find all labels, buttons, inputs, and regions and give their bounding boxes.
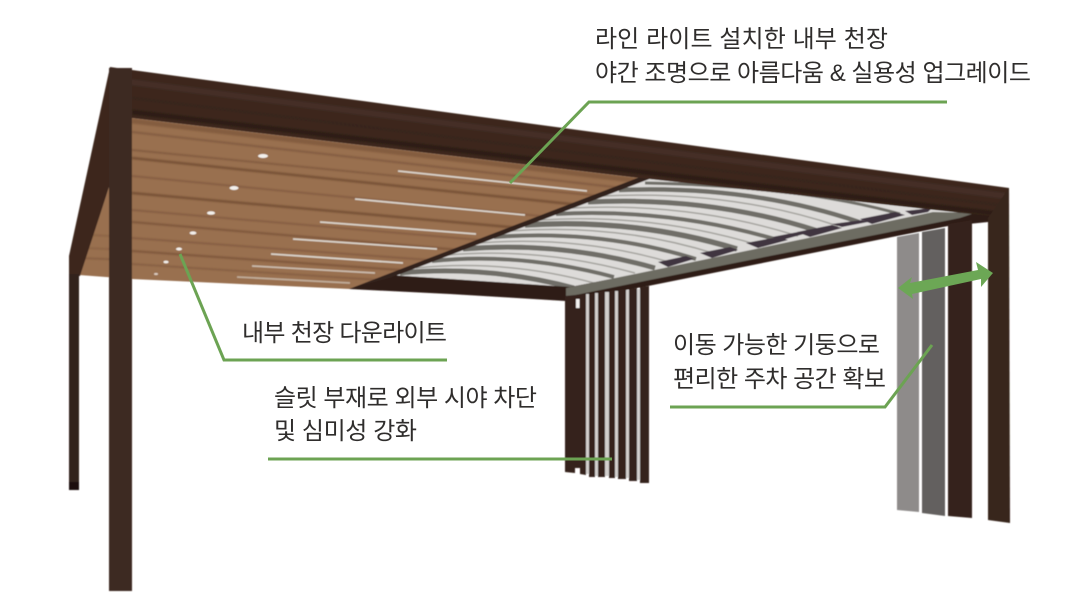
callout: line light ceiling: 야간 조명으로 아름다움 & 실용성 업그레이드	[595, 60, 1031, 87]
pergola structure	[69, 67, 1010, 591]
callout: movable column: 이동 가능한 기둥으로	[673, 332, 880, 359]
leader line: movable column	[670, 345, 932, 407]
callout: line light ceiling: 라인 라이트 설치한 내부 천장	[595, 26, 888, 53]
wood ceiling	[79, 118, 640, 289]
double arrow: passage width	[898, 262, 993, 299]
grey side channel	[566, 212, 975, 297]
callout: slats	[274, 385, 537, 445]
dark underside beam	[349, 212, 1000, 301]
leader line: downlight	[180, 254, 447, 360]
downlights	[154, 154, 268, 275]
leader line: slats	[268, 458, 612, 460]
callout: movable column	[673, 332, 886, 393]
line lights	[237, 171, 587, 283]
left diagonal brace	[69, 67, 118, 276]
right corner post	[988, 188, 1010, 523]
slat screen	[565, 286, 649, 483]
left rear post	[69, 274, 79, 490]
callout: slats: 및 심미성 강화	[274, 418, 417, 445]
callout: line light ceiling	[595, 26, 1031, 87]
dark louver ends	[658, 208, 932, 267]
top beam	[110, 67, 1009, 218]
louvers	[390, 178, 960, 288]
slat gap shading	[586, 289, 640, 480]
front left post	[109, 68, 132, 591]
right inner post	[948, 220, 972, 518]
callout: movable column: 편리한 주차 공간 확보	[673, 366, 886, 393]
callout: downlight: 내부 천장 다운라이트	[242, 320, 447, 347]
grey side panels	[897, 228, 945, 516]
callout: slats: 슬릿 부재로 외부 시야 차단	[274, 385, 537, 412]
leader line: line lights	[510, 102, 947, 183]
diagonal ceiling edge	[349, 177, 652, 289]
